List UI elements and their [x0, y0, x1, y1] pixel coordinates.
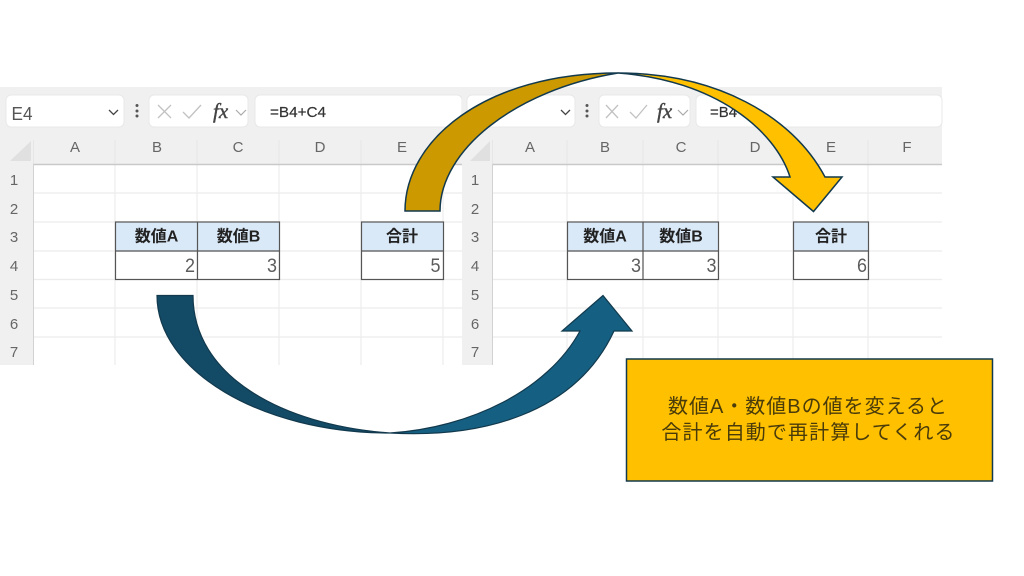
callout: 合計を自動で再計算してくれる: [661, 421, 956, 444]
left column headers: B: [152, 139, 162, 156]
left column headers: A: [70, 139, 80, 156]
left function buttons: [149, 95, 248, 127]
left row headers: 4: [10, 258, 18, 275]
right total table: 合計: [815, 228, 847, 246]
right column headers: F: [902, 139, 912, 156]
right row headers: 6: [471, 316, 479, 333]
left row headers: 5: [10, 287, 18, 304]
right input table: 数値B: [659, 226, 703, 246]
right column headers: D: [750, 139, 761, 156]
left formula bar: =B4+C4: [270, 104, 326, 121]
right formula bar: =B4: [710, 104, 737, 121]
callout: 数値A・数値Bの値を変えると: [668, 395, 948, 418]
arrow: value A to value A (blue): [157, 296, 632, 434]
right column headers: A: [525, 139, 535, 156]
left total table: [362, 222, 444, 280]
right input table: 数値A: [583, 226, 627, 246]
right function buttons: [599, 95, 690, 127]
left input table: 数値A: [135, 226, 179, 246]
left name box: [6, 95, 124, 127]
left row headers: 1: [10, 172, 18, 189]
right column headers: [525, 139, 912, 156]
right row headers: 7: [471, 344, 479, 361]
right input table: 3: [631, 255, 641, 277]
right column headers: E: [826, 139, 836, 156]
arrow: total to total (gold): [405, 73, 842, 212]
right total table: [794, 222, 868, 280]
right row headers: [471, 172, 479, 361]
left total table: 合計: [386, 228, 418, 246]
left spreadsheet: [0, 87, 462, 365]
right name box: [467, 95, 575, 127]
left input table: 3: [267, 255, 277, 277]
right column headers: B: [600, 139, 610, 156]
left name box: E4: [12, 103, 32, 124]
left input table: 2: [185, 255, 195, 277]
right formula bar: [696, 95, 942, 127]
left row headers: 3: [10, 229, 18, 246]
left function buttons: fx: [213, 99, 229, 123]
right row headers: 3: [471, 229, 479, 246]
left column headers: C: [233, 139, 244, 156]
callout: [626, 359, 992, 481]
left total table: 5: [430, 255, 441, 277]
right function buttons: fx: [657, 99, 673, 123]
left input table: 数値B: [217, 226, 260, 246]
right row headers: 5: [471, 287, 479, 304]
left input table: [116, 222, 280, 280]
right row headers: 2: [471, 201, 479, 218]
right row headers: 4: [471, 258, 479, 275]
right total table: 6: [857, 255, 867, 277]
left column headers: [70, 139, 407, 156]
right input table: 3: [706, 255, 716, 277]
left row headers: [10, 172, 18, 361]
right input table: [568, 222, 718, 280]
right row headers: 1: [471, 172, 479, 189]
left formula bar: [255, 95, 462, 127]
right column headers: C: [676, 139, 687, 156]
left toolbar dots: [136, 104, 138, 118]
left column headers: D: [315, 139, 326, 156]
left row headers: 6: [10, 316, 18, 333]
left row headers: 7: [10, 344, 18, 361]
left column headers: E: [397, 139, 407, 156]
right toolbar dots: [586, 104, 588, 118]
left row headers: 2: [10, 201, 18, 218]
right spreadsheet: [462, 87, 942, 365]
